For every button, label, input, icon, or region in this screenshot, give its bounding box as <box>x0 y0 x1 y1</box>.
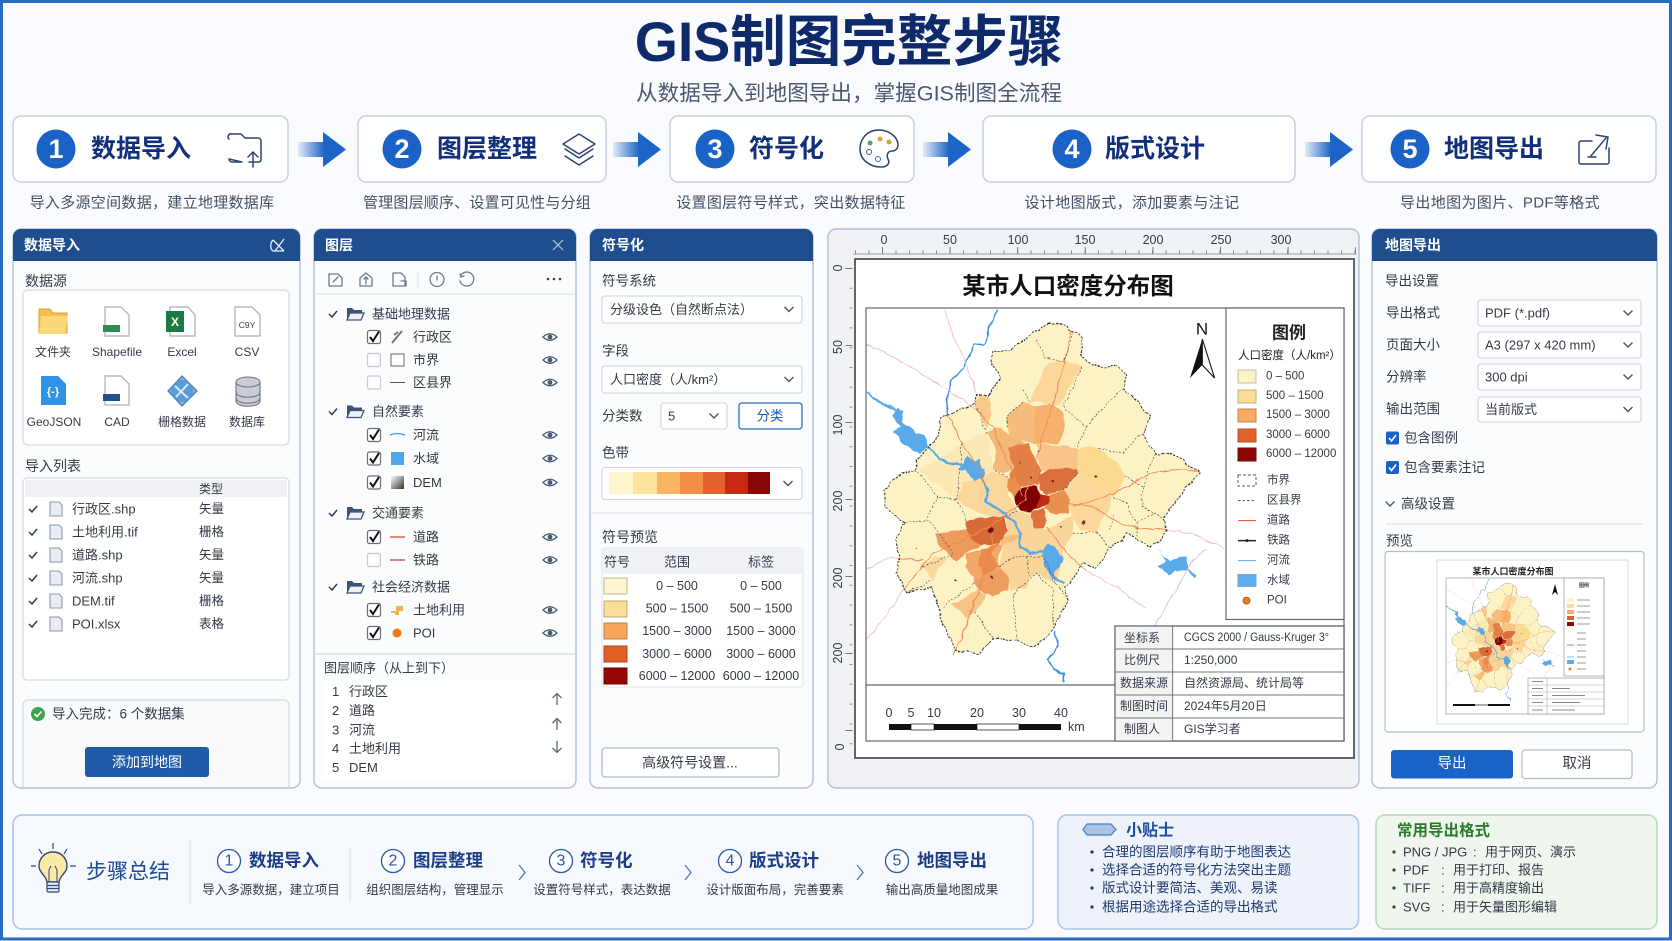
step descriptions: 导入多源空间数据，建立地理数据库 <box>30 194 274 212</box>
map info table: 自然资源局、统计局等 <box>1184 675 1304 690</box>
layer order: DEM <box>349 760 378 775</box>
layer tree: 铁路 <box>413 552 439 568</box>
button: cancel: 取消 <box>1562 755 1592 772</box>
step 5 card: 地图导出 <box>1444 135 1544 163</box>
north arrow <box>1190 320 1215 378</box>
icon: csv: C9Y <box>239 320 256 330</box>
layer tree: 行政区 <box>413 330 452 344</box>
classes row: 分类数 <box>602 408 643 424</box>
panel: tips <box>1058 815 1358 929</box>
subtitle: 从数据导入到地图导出，掌握GIS制图全流程 <box>636 80 1062 106</box>
panel: tips: 根据用途选择合适的导出格式 <box>1102 898 1278 914</box>
map info table: CGCS 2000 / Gauss-Kruger 3° <box>1184 632 1329 644</box>
arrow 1 <box>298 132 346 167</box>
icon: folder upload <box>228 134 261 167</box>
preview map <box>1385 552 1644 732</box>
icon: geojson: {-} <box>47 386 60 398</box>
button: export: 导出 <box>1438 755 1466 772</box>
icon: geojson <box>41 376 66 405</box>
panel: data import: 数据导入 <box>24 237 80 253</box>
icon: export <box>1579 135 1609 164</box>
panel: map layout <box>828 229 1359 788</box>
map info table: 2024年5月20日 <box>1184 699 1267 713</box>
symbol preview table <box>602 548 803 687</box>
export settings form: 输出范围 <box>1386 402 1440 416</box>
panel: symbology: 色带 <box>602 444 629 460</box>
advanced settings: 高级设置 <box>1401 496 1455 512</box>
chevron <box>519 865 525 880</box>
layer tree: 交通要素 <box>372 506 424 520</box>
top ruler <box>853 233 1356 254</box>
layer tree: DEM <box>413 475 442 490</box>
data source grid: GeoJSON <box>27 415 81 429</box>
symbol preview table: 0 – 500 <box>740 579 782 593</box>
classes row <box>602 403 802 429</box>
data source grid: 数据库 <box>229 414 265 429</box>
panel: export formats: : <box>1441 900 1445 914</box>
layer order: 3 <box>332 722 339 738</box>
step descriptions: 导出地图为图片、PDF等格式 <box>1400 194 1600 212</box>
symbol preview table: 0 – 500 <box>656 579 698 593</box>
checkboxes: 包含要素注记 <box>1404 460 1485 475</box>
summary step 3: 3 <box>557 852 566 870</box>
summary step 5: 地图导出 <box>917 850 987 870</box>
summary step 3: 设置符号样式，表达数据 <box>533 882 671 897</box>
symbol preview table: 500 – 1500 <box>730 602 792 616</box>
step descriptions: 管理图层顺序、设置可见性与分组 <box>363 194 591 212</box>
select: symbol system <box>602 296 802 323</box>
map info table: GIS学习者 <box>1184 721 1241 736</box>
layer order: 1 <box>332 684 339 699</box>
icon: folder <box>39 309 68 334</box>
panel: map export: 地图导出 <box>1385 237 1441 253</box>
symbol preview table: 1500 – 3000 <box>726 624 796 638</box>
step descriptions <box>30 194 1600 212</box>
chevron <box>685 865 691 880</box>
summary step 4 <box>706 850 844 897</box>
top ruler: 150 <box>1075 233 1095 247</box>
legend: 6000 – 12000 <box>1266 448 1336 460</box>
import list: 表格 <box>199 616 225 631</box>
select: field <box>602 366 802 393</box>
symbol preview table: 1500 – 3000 <box>642 624 712 638</box>
layer tree: 土地利用 <box>413 602 465 618</box>
layer tree: 水域 <box>413 451 439 466</box>
legend: 人口密度（人/km²） <box>1238 348 1341 362</box>
left ruler: 200 <box>831 491 845 511</box>
panel: export formats: : <box>1441 862 1445 878</box>
left ruler <box>831 264 851 756</box>
icon: light bulb <box>31 843 76 892</box>
scale bar: 0 <box>886 706 893 720</box>
top ruler: 100 <box>1008 233 1028 247</box>
import list: 矢量 <box>199 548 224 562</box>
icon: raster <box>168 376 197 406</box>
color ramp <box>602 468 802 500</box>
legend: 区县界 <box>1267 494 1302 507</box>
panel: symbology: 符号系统 <box>602 274 656 288</box>
scale bar <box>866 685 1115 734</box>
panel: tips: 选择合适的符号化方法突出主题 <box>1102 862 1291 878</box>
step 3 card: 3 <box>707 134 723 164</box>
legend: 市界 <box>1267 473 1290 487</box>
import list: DEM.tif <box>72 594 115 608</box>
layer order: 土地利用 <box>349 741 401 756</box>
layer tree: 河流 <box>413 428 439 442</box>
export settings form: 300 dpi <box>1485 370 1528 384</box>
panel: data import <box>13 229 300 788</box>
panel: export formats: 常用导出格式 <box>1397 820 1491 840</box>
panel: data import: 数据源 <box>25 273 67 289</box>
summary step 1: 导入多源数据，建立项目 <box>202 882 340 897</box>
layer order <box>323 660 569 779</box>
map sheet <box>855 259 1354 758</box>
preview map: 某市人口密度分布图 <box>1472 566 1554 576</box>
legend: 水域 <box>1267 574 1290 587</box>
data source grid: Shapefile <box>92 345 142 359</box>
button: add to map <box>85 747 209 777</box>
step 4 card: 4 <box>1064 134 1080 164</box>
symbol preview table: 6000 – 12000 <box>723 669 799 683</box>
icon: cad <box>103 376 129 405</box>
summary step 1: 1 <box>225 852 234 870</box>
icon: csv <box>235 307 260 336</box>
panel: export formats: 用于打印、报告 <box>1453 862 1544 878</box>
panel: export formats: : <box>1473 844 1477 860</box>
panel: symbology: 符号预览 <box>602 529 658 545</box>
preview map: 图例 <box>1579 582 1589 589</box>
panel: export formats: PDF <box>1403 862 1429 878</box>
summary step 5: 输出高质量地图成果 <box>886 882 999 897</box>
import list: 栅格 <box>199 593 225 608</box>
button: cancel <box>1522 750 1632 778</box>
scale bar: 10 <box>927 706 941 720</box>
import list: 行政区.shp <box>72 502 136 516</box>
top ruler: 300 <box>1271 233 1291 247</box>
summary step 4: 设计版面布局，完善要素 <box>706 882 844 897</box>
left ruler: 100 <box>831 415 845 435</box>
chevron <box>857 865 863 880</box>
symbol preview table: 标签 <box>748 554 774 570</box>
data source grid: Excel <box>167 345 197 359</box>
layer tree <box>329 306 557 640</box>
import list: 矢量 <box>199 502 224 516</box>
panel: export formats <box>1376 815 1657 929</box>
choropleth map <box>867 310 1225 683</box>
panel: symbology: 符号化 <box>602 237 644 253</box>
arrow 2 <box>613 132 661 167</box>
water <box>892 408 928 453</box>
panel: export formats: 用于网页、演示 <box>1485 844 1576 860</box>
scale bar: 40 <box>1054 706 1068 720</box>
panel: export formats: 用于高精度输出 <box>1453 880 1544 896</box>
icon: excel <box>166 307 195 336</box>
import list: 栅格 <box>199 524 225 539</box>
scale bar: 30 <box>1012 706 1026 720</box>
summary step 1 <box>202 850 340 897</box>
data source grid: 栅格数据 <box>158 414 206 429</box>
map info table: 比例尺 <box>1124 653 1160 667</box>
export settings form: 导出格式 <box>1386 306 1440 320</box>
data source grid: CSV <box>235 345 259 359</box>
map info table: 制图时间 <box>1120 699 1168 713</box>
icon: database <box>236 377 260 406</box>
panel: symbology <box>590 229 813 788</box>
panel: layers: 图层 <box>325 237 353 253</box>
summary step 5: 5 <box>893 852 902 870</box>
layer order: 行政区 <box>349 684 388 699</box>
icon: excel: X <box>171 315 179 329</box>
panel: tips: 小贴士 <box>1126 822 1174 840</box>
data source grid: CAD <box>104 415 130 429</box>
layer tree: 道路 <box>413 530 439 544</box>
summary step 2: 图层整理 <box>413 850 483 870</box>
step descriptions: 设计地图版式，添加要素与注记 <box>1025 194 1239 212</box>
import list: 河流.shp <box>72 570 123 586</box>
symbol preview table: 范围 <box>664 554 690 570</box>
panel: steps summary: 步骤总结 <box>86 860 170 884</box>
top ruler: 200 <box>1143 233 1163 247</box>
top ruler: 0 <box>881 233 888 247</box>
legend: 500 – 1500 <box>1266 390 1324 402</box>
export settings form: A3 (297 x 420 mm) <box>1485 338 1596 352</box>
title: GIS制图完整步骤 <box>635 11 1063 73</box>
step 2 card: 2 <box>394 134 410 164</box>
summary step 2: 2 <box>389 852 398 870</box>
left ruler: 0 <box>833 743 847 750</box>
top ruler: 250 <box>1211 233 1231 247</box>
checkboxes: 包含图例 <box>1404 430 1458 446</box>
data source grid: 文件夹 <box>35 344 71 359</box>
panel: tips: 合理的图层顺序有助于地图表达 <box>1102 844 1291 860</box>
step 5 card: 5 <box>1402 134 1418 164</box>
layer order: 5 <box>332 760 339 775</box>
step 2 card <box>358 116 606 182</box>
map info table: 数据来源 <box>1120 675 1168 690</box>
panel: steps summary <box>13 815 1033 929</box>
legend: 0 – 500 <box>1266 371 1304 383</box>
left ruler: 200 <box>831 568 845 588</box>
panel: symbology: 字段 <box>602 344 629 358</box>
select: field: 人口密度（人/km²） <box>610 372 726 387</box>
step 2 card: 图层整理 <box>437 135 537 163</box>
legend: 铁路 <box>1267 533 1290 547</box>
summary step 3 <box>533 850 671 897</box>
panel: map export <box>1372 229 1657 788</box>
icon: shapefile <box>103 307 129 336</box>
panel: export formats: TIFF <box>1403 880 1430 896</box>
import status <box>23 700 289 787</box>
layer tree: POI <box>413 626 435 640</box>
panel: layers <box>314 229 576 788</box>
layer tree: 区县界 <box>413 375 452 390</box>
symbol preview table: 500 – 1500 <box>646 602 708 616</box>
scale bar: 5 <box>908 706 915 720</box>
arrow 3 <box>923 132 971 167</box>
legend: 河流 <box>1267 553 1290 567</box>
legend <box>1226 308 1344 620</box>
roads <box>867 310 1225 655</box>
legend: 道路 <box>1267 513 1290 527</box>
classes row: 5 <box>668 408 675 424</box>
left ruler: 50 <box>831 340 845 354</box>
step 1 card <box>13 116 288 182</box>
step descriptions: 设置图层符号样式，突出数据特征 <box>676 194 906 212</box>
button: add to map: 添加到地图 <box>112 754 182 770</box>
import list: 土地利用.tif <box>72 524 138 540</box>
step 3 card <box>670 116 914 182</box>
left ruler: 200 <box>831 643 845 663</box>
summary step 2 <box>366 850 504 897</box>
button: export <box>1391 750 1513 778</box>
data source grid <box>23 290 289 445</box>
step 1 card: 数据导入 <box>91 135 191 163</box>
panel: export formats: : <box>1441 880 1445 896</box>
arrow 4 <box>1305 132 1353 167</box>
left ruler: 0 <box>831 264 845 271</box>
icon: palette <box>860 130 898 167</box>
classes row: 分类 <box>756 408 784 424</box>
map info table: 坐标系 <box>1124 631 1160 645</box>
import status: 导入完成：6 个数据集 <box>52 706 185 722</box>
map info table <box>1115 626 1344 741</box>
step 5 card <box>1362 116 1656 182</box>
legend: 图例 <box>1272 324 1306 342</box>
step 4 card: 版式设计 <box>1105 135 1205 163</box>
panel: tips: 版式设计要简洁、美观、易读 <box>1102 880 1278 896</box>
panel: export formats: PNG / JPG <box>1403 844 1467 860</box>
summary step 2: 组织图层结构，管理显示 <box>366 882 504 897</box>
panel: export formats: SVG <box>1403 900 1430 914</box>
layer order: 4 <box>332 741 339 756</box>
north arrow: N <box>1196 320 1208 338</box>
panel: map export: 导出设置 <box>1385 274 1439 288</box>
layer tree: 社会经济数据 <box>372 580 450 594</box>
scale bar: km <box>1068 720 1085 734</box>
button: advanced symbol settings: 高级符号设置... <box>642 754 738 770</box>
summary step 1: 数据导入 <box>249 850 319 870</box>
export settings form: 页面大小 <box>1386 338 1440 352</box>
top ruler: 50 <box>943 233 957 247</box>
map info table: 制图人 <box>1124 722 1160 736</box>
step 3 card: 符号化 <box>749 135 824 163</box>
summary step 5 <box>886 850 999 897</box>
layer order: 河流 <box>349 722 375 738</box>
layer tree: 基础地理数据 <box>372 306 450 322</box>
map frame <box>866 308 1344 741</box>
step 4 card <box>983 116 1295 182</box>
import list: 道路.shp <box>72 548 123 562</box>
symbol preview table: 符号 <box>604 554 630 570</box>
map info table: 1:250,000 <box>1184 653 1238 667</box>
import list: 矢量 <box>199 571 224 585</box>
panel: map export: 预览 <box>1386 534 1413 548</box>
checkboxes <box>1386 430 1485 475</box>
import list <box>23 478 289 680</box>
export settings form <box>1386 300 1641 422</box>
symbol preview table: 3000 – 6000 <box>726 647 796 661</box>
panel: data import: 导入列表 <box>25 458 81 474</box>
export settings form: PDF (*.pdf) <box>1485 306 1550 320</box>
layer tree: 自然要素 <box>372 404 424 419</box>
select: symbol system: 分级设色（自然断点法） <box>610 302 753 317</box>
layer order: 图层顺序（从上到下） <box>324 660 454 676</box>
symbol preview table: 3000 – 6000 <box>642 647 712 661</box>
layer order: 2 <box>332 703 339 718</box>
legend: 1500 – 3000 <box>1266 409 1330 421</box>
export settings form: 分辨率 <box>1386 368 1426 384</box>
layer tree: 市界 <box>413 352 439 368</box>
legend: POI <box>1267 595 1287 607</box>
import list: POI.xlsx <box>72 616 121 632</box>
button: advanced symbol settings <box>602 748 779 777</box>
import list: 类型 <box>199 482 223 496</box>
icon: tip tag <box>1083 824 1116 835</box>
map title: 某市人口密度分布图 <box>962 272 1174 299</box>
scale bar: 20 <box>970 706 984 720</box>
layer toolbar <box>314 272 576 294</box>
symbol preview table: 6000 – 12000 <box>639 669 715 683</box>
legend: 3000 – 6000 <box>1266 429 1330 441</box>
step 1 card: 1 <box>48 134 64 164</box>
summary step 3: 符号化 <box>580 850 632 870</box>
summary step 4: 4 <box>726 852 735 870</box>
panel: export formats: 用于矢量图形编辑 <box>1453 900 1557 914</box>
icon: layers <box>563 134 595 165</box>
export settings form: 当前版式 <box>1485 402 1537 417</box>
layer order: 道路 <box>349 703 375 718</box>
poi dots <box>915 451 1098 581</box>
district borders <box>905 333 1163 640</box>
summary step 4: 版式设计 <box>749 850 819 870</box>
